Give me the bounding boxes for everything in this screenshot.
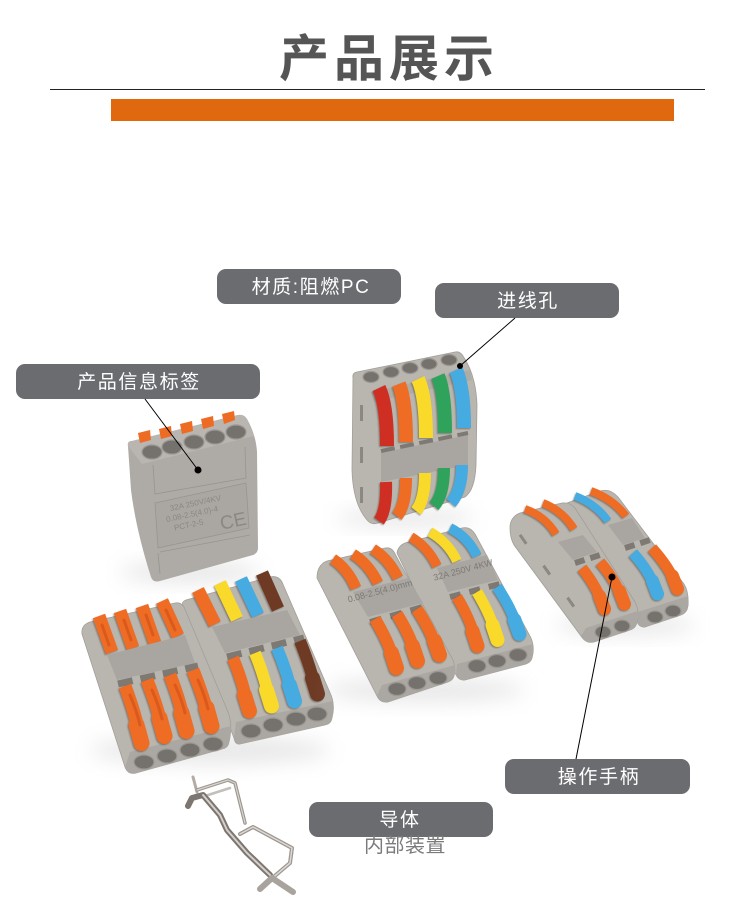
label: handle bbox=[505, 759, 690, 794]
title: 产品展示 bbox=[279, 31, 499, 87]
molded markings bbox=[163, 489, 248, 546]
orange tabs bbox=[138, 411, 235, 443]
connector: rear label side bbox=[120, 411, 260, 582]
molded markings: 32A 250V/4KV bbox=[169, 493, 223, 513]
holes bbox=[142, 425, 246, 459]
label: conductor: 导体 bbox=[379, 809, 421, 831]
title rule bbox=[50, 89, 705, 90]
connector pair: two-way bbox=[510, 490, 695, 642]
holes bbox=[363, 354, 457, 382]
label: conductor bbox=[309, 802, 493, 837]
molded markings: CE bbox=[218, 509, 248, 535]
label: wire hole: 进线孔 bbox=[497, 290, 559, 312]
label: wire hole bbox=[435, 283, 619, 318]
rated marking: 32A 250V 4KW bbox=[432, 557, 494, 583]
central band bbox=[381, 435, 468, 482]
connector pair: four-way bbox=[82, 573, 334, 773]
side slots bbox=[360, 405, 363, 503]
orange banner bar bbox=[111, 99, 674, 121]
connector pair: three-way bbox=[317, 528, 533, 702]
label: product info bbox=[16, 364, 260, 399]
connector: five-way rainbow bbox=[335, 352, 477, 526]
size marking: 0.08-2.5(4.0)mm bbox=[347, 578, 413, 604]
leader line: handle bbox=[576, 574, 616, 759]
label: handle: 操作手柄 bbox=[558, 766, 640, 788]
label: material: 材质:阻燃PC bbox=[252, 276, 370, 298]
molded markings: 0.08-2.5(4.0)-4 bbox=[165, 504, 219, 524]
label: product info: 产品信息标签 bbox=[77, 371, 201, 393]
label: material bbox=[217, 269, 401, 304]
molded markings: PCT-2-5 bbox=[173, 517, 205, 533]
metal conductor clip bbox=[188, 777, 293, 892]
caption: internal device: 内部装置 bbox=[364, 834, 446, 857]
leader line: product info bbox=[145, 399, 202, 474]
levers bbox=[379, 370, 464, 446]
leader line: wire hole bbox=[457, 318, 515, 369]
